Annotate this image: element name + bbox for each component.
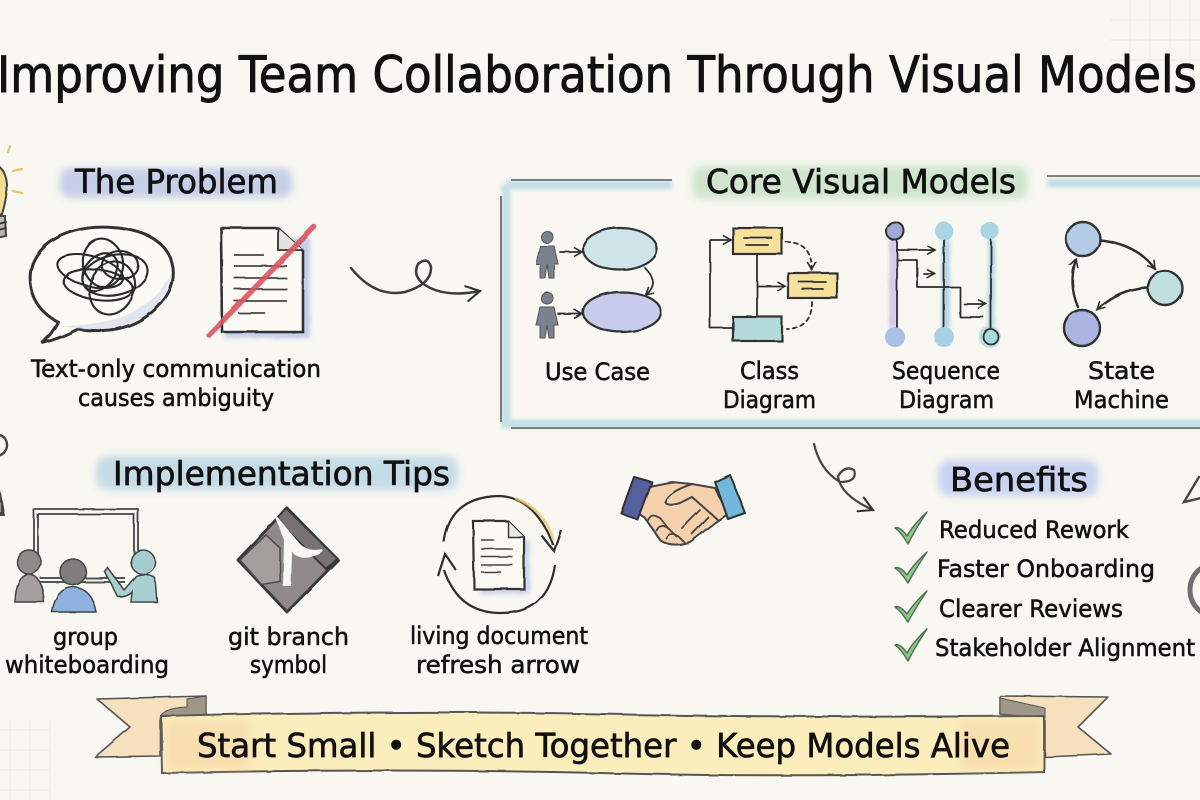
icon: partial person at left edge [0,434,7,516]
ribbon body [161,712,1044,775]
label: use case: Use Case [545,358,650,386]
panel: core visual models [501,162,1200,428]
check item: reduced rework: Reduced Rework [939,516,1129,544]
label: sequence diagram [892,357,1000,414]
icon: crossed out document [209,227,314,338]
icon: living document refresh [438,496,561,613]
label: git branch [228,623,349,679]
heading: implementation tips: Implementation Tips [113,454,450,493]
label: git branch: git branch [228,623,349,651]
caption: text only: causes ambiguity [78,384,274,412]
arrow: models to benefits [814,444,873,510]
caption: text only [30,355,321,412]
label: group whiteboarding: group [53,623,118,651]
label: living document: living document [410,622,588,650]
ribbon warm edges [165,720,1040,770]
icon: tangled speech bubble [30,227,173,343]
label: class diagram: Diagram [723,386,816,414]
benefits checklist [895,512,1195,662]
panel: implementation tips [5,454,588,679]
diagram: class diagram [710,228,837,341]
right ribbon tail [1000,696,1111,757]
icon: handshake [621,475,745,545]
label: group whiteboarding: whiteboarding [5,651,169,679]
frame wash [506,183,1200,424]
panel: the problem [30,162,321,412]
label: state machine: State [1088,357,1155,385]
arrow: problem to models [351,261,480,293]
label: sequence diagram: Sequence [892,357,1000,385]
ribbon banner [95,696,1111,775]
check item: faster onboarding: Faster Onboarding [937,555,1155,583]
ribbon folds [160,696,1045,718]
heading: the problem: The Problem [74,162,278,201]
panel: benefits [895,460,1195,662]
heading: core visual models: Core Visual Models [706,162,1016,201]
icon: partial gear ring at right edge [1190,563,1200,617]
heading wash: core visual models [692,166,1028,199]
icon: group whiteboarding [15,509,157,612]
heading wash: the problem [60,168,292,198]
label: git branch: symbol [250,651,327,679]
icon: light bulb [0,146,22,238]
check item: clearer reviews [895,591,1123,623]
heading wash: implementation tips [96,456,458,490]
label: living document [410,622,588,679]
heading wash: benefits [938,460,1098,496]
label: class diagram [723,357,816,414]
label: state machine: Machine [1074,386,1169,414]
label: class diagram: Class [740,357,799,385]
diagram: state machine [1064,222,1182,346]
caption: text only: Text-only communication [30,355,321,383]
label: state machine [1074,357,1169,414]
icon: git branch [237,508,338,612]
arrow: partial at right edge [1184,477,1200,502]
label: group whiteboarding [5,623,169,679]
diagram: sequence diagram [885,222,1001,348]
diagram: use case [536,228,661,338]
check item: clearer reviews: Clearer Reviews [939,595,1123,623]
label: sequence diagram: Diagram [899,386,994,414]
banner text: Start Small • Sketch Together • Keep Models Alive [197,726,1010,765]
left ribbon tail [95,696,206,757]
label: living document: refresh arrow [416,651,580,679]
heading: benefits: Benefits [950,460,1088,499]
frame lines [501,176,1200,428]
check item: reduced rework [895,512,1129,544]
